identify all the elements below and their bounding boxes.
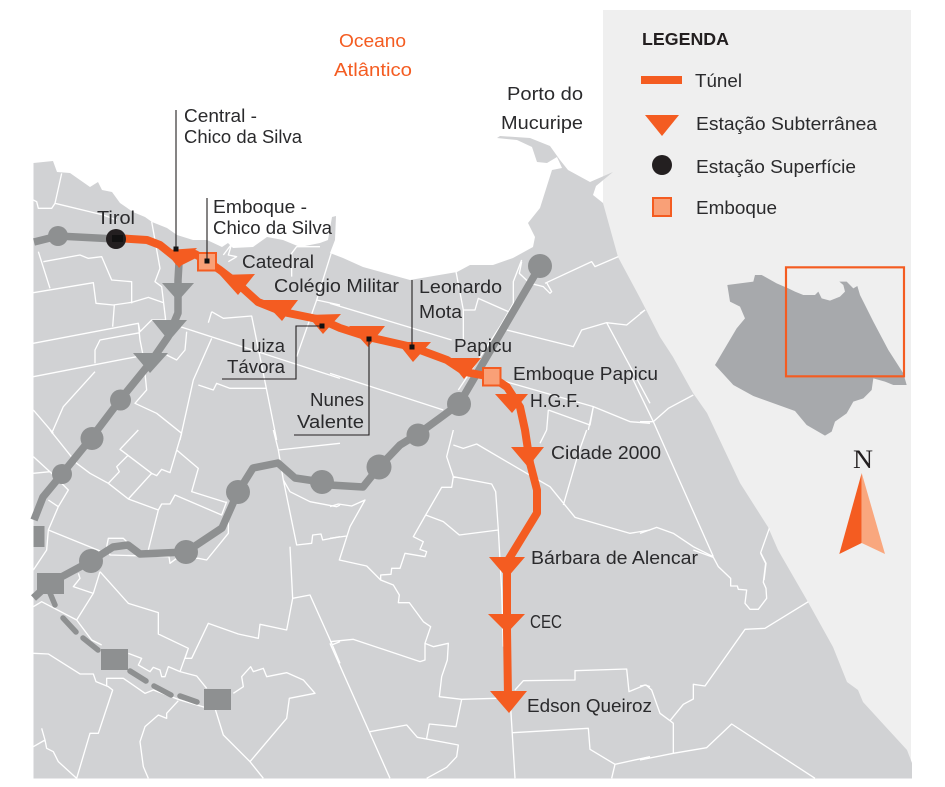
emboque marker: Papicu [483,368,500,386]
transit line: grey line west branch [34,226,194,547]
station labels: H.G.F. [530,390,580,411]
station labels: Emboque Papicu [513,363,658,384]
station labels: Bárbara de Alencar [531,547,698,568]
station labels: Távora [227,356,286,377]
map: neighbourhood boundaries [33,173,815,778]
callout leaders [112,110,414,435]
text: Oceano Atlântico: Oceano [339,30,406,51]
station labels: Edson Queiroz [527,695,652,716]
station labels: Colégio Militar [274,275,399,296]
station labels: Catedral [242,251,314,272]
station labels: Chico da Silva [184,126,303,147]
text: Porto do Mucuripe: Mucuripe [501,112,583,133]
emboque marker: Chico da Silva [198,253,216,270]
station labels: Mota [419,301,463,322]
text: Oceano Atlântico: Atlântico [334,59,412,80]
station labels: Central - [184,105,257,126]
station labels: Chico da Silva [213,217,333,238]
station labels: Emboque - [213,196,307,217]
panel: legend and sea background [603,10,911,778]
text: Oceano Atlântico [334,30,412,80]
text: Porto do Mucuripe [501,83,583,133]
station labels: Leonardo [419,276,502,297]
stations: underground markers [168,248,544,713]
station labels: Luiza [241,335,286,356]
station labels: Nunes [310,389,364,410]
station: Tirol surface [106,229,126,249]
station labels [97,105,698,716]
map: land of Fortaleza [34,136,912,778]
station labels: Cidade 2000 [551,442,661,463]
transit line: grey dashed branch [50,593,231,710]
compass: north arrow [839,445,885,554]
legend: LEGENDA [642,29,729,49]
legend: Emboque [696,197,777,218]
station labels: CEC [530,611,562,632]
station labels: Tirol [97,207,135,228]
legend [641,29,878,218]
legend: Estação Superfície [696,156,856,177]
inset locator map [715,267,907,436]
station labels: Papicu [454,335,512,356]
legend: Túnel [695,70,742,91]
station labels: Valente [297,411,364,432]
text: Porto do Mucuripe: Porto do [507,83,583,104]
transit line: grey line south branch [34,254,552,598]
tunnel: orange line [116,238,537,697]
legend: Estação Subterrânea [696,113,878,134]
compass: north arrow: N [853,445,873,474]
